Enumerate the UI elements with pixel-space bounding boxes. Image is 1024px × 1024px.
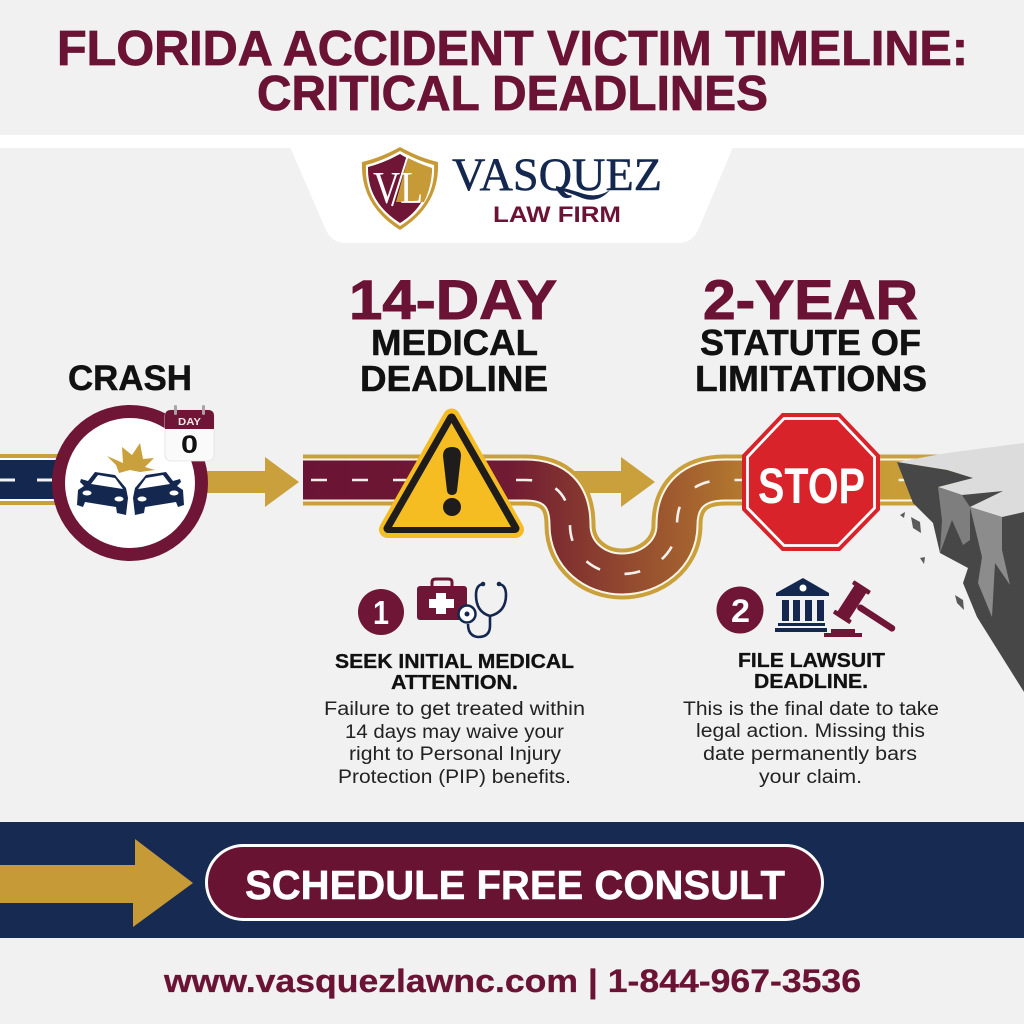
icon: day 0 calendar: DAY <box>178 416 201 428</box>
button: schedule free consult <box>206 846 822 920</box>
step 2 body text: legal action. Missing this <box>696 721 925 742</box>
step 1 heading: SEEK INITIAL MEDICAL <box>335 651 574 673</box>
step 1 heading <box>335 651 574 694</box>
navy road <box>0 454 70 505</box>
icon: cliff <box>897 443 1024 692</box>
step 2 body text: date permanently bars <box>703 744 917 765</box>
icon: day 0 calendar: 0 <box>181 431 198 459</box>
icon: impact burst <box>107 443 155 473</box>
icon: medical bag and stethoscope <box>417 579 506 637</box>
arrow: medical deadline to statute <box>560 457 655 507</box>
title: CRITICAL DEADLINES <box>257 67 768 121</box>
footer contact line: www.vasquezlawnc.com | 1-844-967-3536 <box>163 963 861 999</box>
step 1 body text <box>324 699 585 788</box>
icon: stop sign: STOP <box>758 458 865 514</box>
heading: 2-year statute of limitations: STATUTE OF <box>700 322 921 363</box>
step 1: medical <box>324 579 585 788</box>
step 1 heading: ATTENTION. <box>391 672 518 694</box>
logo panel <box>0 135 1024 243</box>
heading: 14-day medical deadline <box>349 268 557 399</box>
step 2 body text <box>683 699 939 788</box>
heading: 14-day medical deadline: 14-DAY <box>349 268 557 331</box>
title: FLORIDA ACCIDENT VICTIM TIMELINE: <box>57 22 968 76</box>
icon: stop sign <box>742 413 880 551</box>
step 1 body text: Protection (PIP) benefits. <box>338 767 571 788</box>
arrow: crash to medical deadline <box>205 457 299 507</box>
logo wordmark: VASQUEZ <box>452 149 662 201</box>
step 2 number badge: 2 <box>731 593 750 629</box>
icon: courthouse <box>775 578 829 632</box>
title <box>57 22 968 121</box>
logo subtitle: LAW FIRM <box>493 202 621 227</box>
call to action banner <box>0 822 1024 938</box>
step 1 body text: Failure to get treated within <box>324 699 585 720</box>
icon: shield logo <box>362 147 438 230</box>
icon: gavel <box>824 580 905 647</box>
crash circle icon <box>52 405 214 561</box>
step 2 heading: DEADLINE. <box>754 671 868 693</box>
step 2: lawsuit <box>683 578 939 788</box>
step 2 number badge <box>716 586 764 634</box>
icon: day 0 calendar <box>165 405 214 461</box>
step 2 heading <box>738 650 885 693</box>
heading: 2-year statute of limitations: LIMITATIONS <box>695 358 927 399</box>
icon: crashing cars <box>77 472 184 515</box>
arrow: banner <box>0 839 193 927</box>
step 1 body text: right to Personal Injury <box>349 744 562 765</box>
icon: shield logo: VL <box>373 162 423 213</box>
heading: 14-day medical deadline: DEADLINE <box>360 358 548 399</box>
winding road <box>303 480 960 574</box>
step 2 body text: This is the final date to take <box>683 699 939 720</box>
step 1 body text: 14 days may waive your <box>345 722 565 743</box>
heading: 2-year statute of limitations: 2-YEAR <box>703 268 918 331</box>
heading: crash: CRASH <box>68 359 192 398</box>
icon: warning triangle <box>388 417 516 530</box>
step 2 body text: your claim. <box>759 767 862 788</box>
button: schedule free consult: SCHEDULE FREE CONSULT <box>245 862 785 908</box>
step 1 number badge <box>358 589 404 635</box>
step 2 heading: FILE LAWSUIT <box>738 650 885 672</box>
step 1 number badge: 1 <box>373 594 389 631</box>
heading: 14-day medical deadline: MEDICAL <box>371 322 538 363</box>
heading: 2-year statute of limitations <box>695 268 927 399</box>
